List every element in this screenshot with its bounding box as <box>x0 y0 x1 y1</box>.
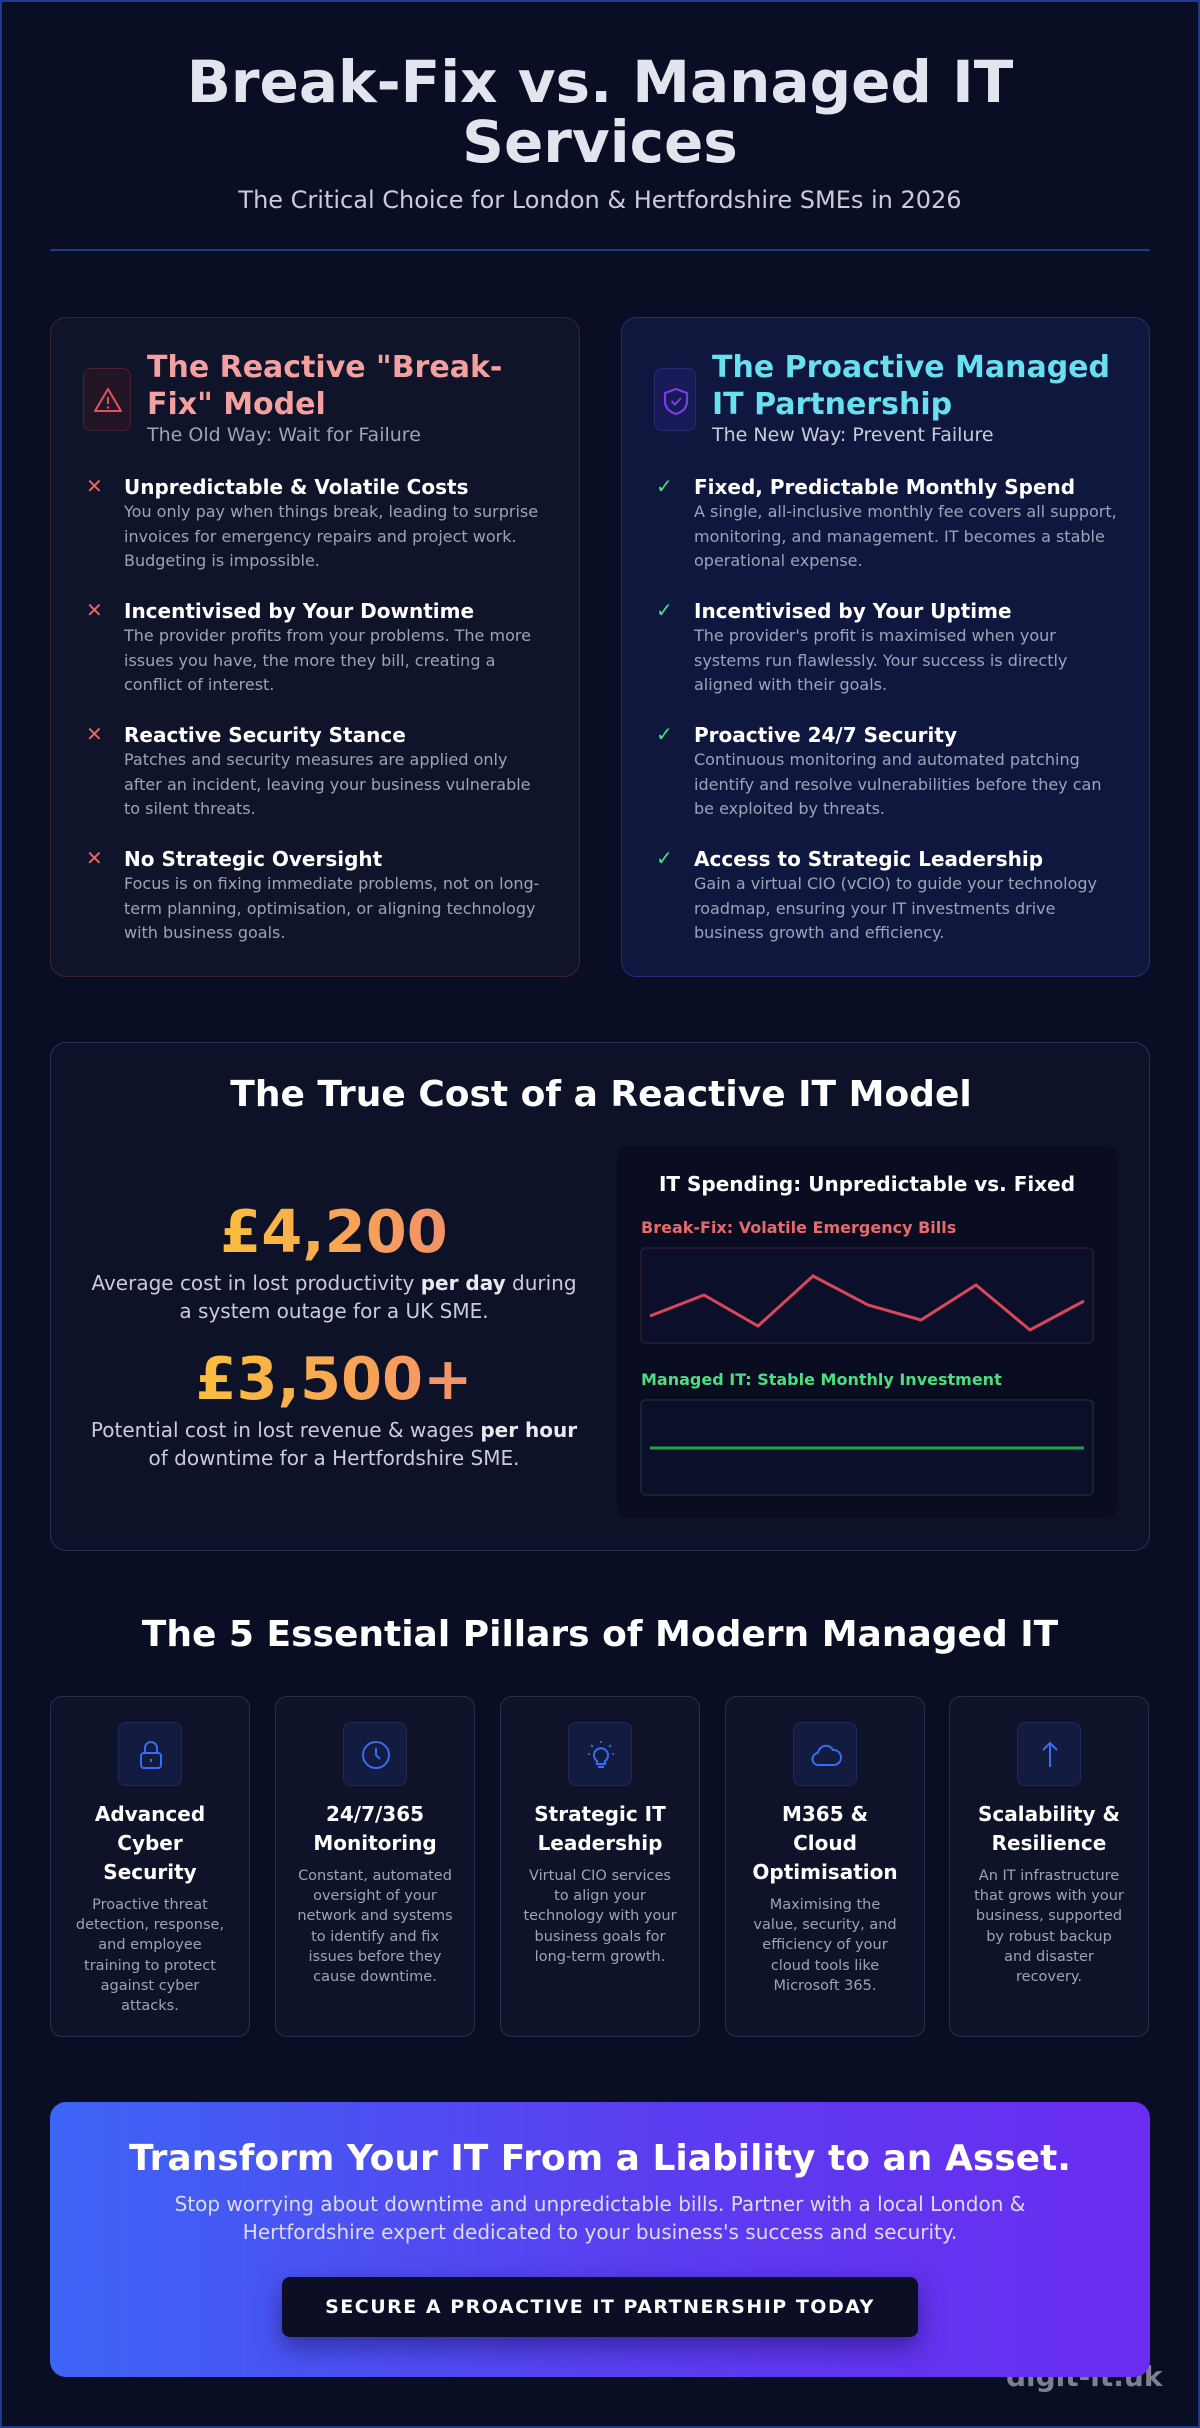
stat 2: of downtime for a Hertfordshire SME. <box>149 1446 519 1470</box>
panel: break-fix: ✕ <box>86 598 103 622</box>
heading: true cost: The True Cost of a Reactive IT Model <box>230 1074 972 1115</box>
title: Break-Fix vs. Managed IT <box>187 48 1013 116</box>
subtitle: The Critical Choice for London & Hertfordshire SMEs in 2026 <box>238 186 962 214</box>
panel: break-fix: ✕ <box>86 474 103 498</box>
pillar: cloud <box>725 1696 925 2037</box>
item 2: Incentivised by Your Downtime <box>124 599 474 623</box>
pillar: cloud: cloud tools like <box>771 1958 879 1974</box>
subheading: The New Way: Prevent Failure <box>712 424 994 446</box>
item 4 <box>656 846 1097 942</box>
pillar: leadership: business goals for <box>535 1929 665 1945</box>
pillar: leadership: Virtual CIO services <box>529 1868 671 1884</box>
CTA heading: Transform Your IT From a Liability to an Asset. <box>129 2138 1071 2179</box>
title: Services <box>462 108 738 176</box>
item 3: identify and resolve vulnerabilities before they can <box>694 774 1101 794</box>
panel: break-fix: ✕ <box>86 722 103 746</box>
stat 1: £4,200 <box>220 1197 448 1266</box>
item 1 <box>656 474 1117 570</box>
pillar: security: training to protect <box>84 1958 216 1974</box>
list: break-fix items <box>86 474 539 942</box>
stat 2 <box>91 1344 578 1470</box>
item 3 <box>656 722 1101 818</box>
pillar: monitoring: network and systems <box>297 1908 453 1924</box>
pillar: monitoring: Monitoring <box>313 1831 437 1855</box>
pillar: cloud: M365 & <box>782 1802 868 1826</box>
item 3: Reactive Security Stance <box>124 723 406 747</box>
item 4: business growth and efficiency. <box>694 923 944 942</box>
item 3: Proactive 24/7 Security <box>694 723 957 747</box>
item 2: Incentivised by Your Uptime <box>694 599 1012 623</box>
pillar: monitoring: issues before they <box>308 1949 442 1965</box>
item 2: aligned with their goals. <box>694 675 887 694</box>
pillar: cloud: Optimisation <box>752 1860 898 1884</box>
heading: managed: The Proactive Managed <box>712 350 1110 385</box>
heading: managed <box>712 350 1110 422</box>
stat 1 <box>91 1197 577 1323</box>
pillar: scalability: by robust backup <box>986 1929 1112 1945</box>
item 2: The provider profits from your problems. The more <box>124 626 531 645</box>
pillar: scalability: and disaster <box>1004 1949 1094 1965</box>
pillar: scalability: Scalability & <box>978 1802 1120 1826</box>
panel: managed: ✓ <box>656 474 673 498</box>
item 4: Gain a virtual CIO (vCIO) to guide your technology <box>694 874 1097 893</box>
heading: break-fix <box>147 350 502 422</box>
stat 2: £3,500+ <box>195 1344 473 1413</box>
icon: shield <box>654 368 696 431</box>
subheading: The Old Way: Wait for Failure <box>147 424 421 446</box>
CTA button: SECURE A PROACTIVE IT PARTNERSHIP TODAY <box>325 2296 875 2318</box>
pillar: leadership: long-term growth. <box>535 1949 665 1965</box>
pillar: scalability: recovery. <box>1016 1969 1082 1985</box>
item 1: You only pay when things break, leading to surprise <box>124 502 538 521</box>
chart: spending: Break-Fix: Volatile Emergency Bills <box>641 1218 956 1237</box>
pillar: cloud: Maximising the <box>770 1897 880 1913</box>
item 1: monitoring, and management. IT becomes a stable <box>694 526 1105 546</box>
title <box>187 48 1013 176</box>
panel: managed: ✓ <box>656 846 673 870</box>
list: managed items <box>656 474 1117 942</box>
panel: managed: ✓ <box>656 722 673 746</box>
stat 2: Potential cost in lost revenue & wages per hour <box>91 1418 577 1442</box>
CTA button <box>282 2277 918 2337</box>
pillar: monitoring: 24/7/365 <box>326 1802 424 1826</box>
item 1: Budgeting is impossible. <box>124 551 320 570</box>
panel: break-fix: ✕ <box>86 846 103 870</box>
chart: spending <box>617 1146 1117 1518</box>
pillar: monitoring: Constant, automated <box>298 1868 452 1884</box>
chart: spending: Managed IT: Stable Monthly Investment <box>641 1370 1002 1389</box>
item 3: Continuous monitoring and automated patching <box>694 750 1080 769</box>
icon: warning <box>83 368 131 431</box>
chart: spending: IT Spending: Unpredictable vs. Fixed <box>659 1172 1075 1196</box>
heading: managed: IT Partnership <box>712 387 952 422</box>
item 4: No Strategic Oversight <box>124 847 382 871</box>
panel: break-fix <box>50 317 580 977</box>
pillar: security: attacks. <box>121 1998 179 2014</box>
pillar: monitoring: oversight of your <box>313 1888 437 1904</box>
item 4 <box>86 846 539 942</box>
item 4: Access to Strategic Leadership <box>694 847 1043 871</box>
pillar: scalability: Resilience <box>992 1831 1106 1855</box>
pillar: leadership: Leadership <box>538 1831 662 1855</box>
panel: managed: ✓ <box>656 598 673 622</box>
pillar: security: detection, response, <box>76 1917 224 1933</box>
heading: break-fix: The Reactive "Break- <box>147 350 502 385</box>
pillar: monitoring: to identify and fix <box>311 1929 439 1945</box>
pillar: security: Cyber <box>117 1831 183 1855</box>
pillar: security <box>50 1696 250 2037</box>
item 1 <box>86 474 538 570</box>
pillar: security: Proactive threat <box>92 1897 208 1913</box>
pillar: leadership: to align your <box>554 1888 646 1904</box>
pillar: cloud: efficiency of your <box>762 1937 888 1953</box>
pillar: scalability: that grows with your <box>974 1888 1124 1904</box>
item 3: to silent threats. <box>124 799 256 818</box>
item 3: Patches and security measures are applied only <box>124 750 507 769</box>
item 1: operational expense. <box>694 551 863 570</box>
panel: true cost <box>50 1042 1150 1551</box>
pillar: monitoring <box>275 1696 475 2037</box>
pillar: cloud: value, security, and <box>753 1917 897 1933</box>
item 4: roadmap, ensuring your IT investments drive <box>694 898 1055 918</box>
CTA panel <box>50 2102 1150 2377</box>
item 1: Unpredictable & Volatile Costs <box>124 475 468 499</box>
pillar: scalability <box>949 1696 1149 2037</box>
pillar: scalability: An IT infrastructure <box>979 1868 1119 1884</box>
item 2: issues you have, the more they bill, creating a <box>124 650 495 670</box>
pillar: leadership: Strategic IT <box>534 1802 666 1826</box>
pillar: leadership <box>500 1696 700 2037</box>
item 1: A single, all-inclusive monthly fee covers all support, <box>694 502 1117 521</box>
heading: break-fix: Fix" Model <box>147 387 326 422</box>
item 1: invoices for emergency repairs and project work. <box>124 526 517 546</box>
item 3 <box>86 722 531 818</box>
item 4: with business goals. <box>124 923 285 942</box>
item 1: Fixed, Predictable Monthly Spend <box>694 475 1075 499</box>
item 3: be exploited by threats. <box>694 799 885 818</box>
stat 1: a system outage for a UK SME. <box>179 1299 489 1323</box>
heading: pillars: The 5 Essential Pillars of Modern Managed IT <box>142 1614 1058 1655</box>
watermark: digit-it.uk <box>1006 2360 1162 2393</box>
panel: managed <box>621 317 1150 977</box>
item 2: systems run flawlessly. Your success is directly <box>694 650 1067 670</box>
pillar: monitoring: cause downtime. <box>313 1969 437 1985</box>
item 4: term planning, optimisation, or aligning technology <box>124 898 535 918</box>
pillar: security: and employee <box>98 1937 202 1953</box>
pillar: cloud: Microsoft 365. <box>774 1978 876 1994</box>
CTA text <box>175 2192 1025 2244</box>
pillar: cloud: Cloud <box>793 1831 857 1855</box>
pillar: security: Advanced <box>95 1802 205 1826</box>
CTA text: Stop worrying about downtime and unpredictable bills. Partner with a local London & <box>175 2192 1025 2216</box>
pillar: security: Security <box>103 1860 197 1884</box>
pillar: security: against cyber <box>101 1978 199 1994</box>
pillar: leadership: technology with your <box>523 1908 677 1924</box>
item 2: conflict of interest. <box>124 675 274 694</box>
item 2 <box>656 598 1067 694</box>
item 2 <box>86 598 531 694</box>
CTA text: Hertfordshire expert dedicated to your business's success and security. <box>243 2220 957 2244</box>
item 2: The provider's profit is maximised when your <box>694 626 1056 645</box>
stat 1: Average cost in lost productivity per day during <box>91 1271 577 1295</box>
pillar: scalability: business, supported <box>976 1908 1122 1924</box>
item 4: Focus is on fixing immediate problems, not on long- <box>124 874 539 893</box>
item 3: after an incident, leaving your business vulnerable <box>124 774 531 794</box>
